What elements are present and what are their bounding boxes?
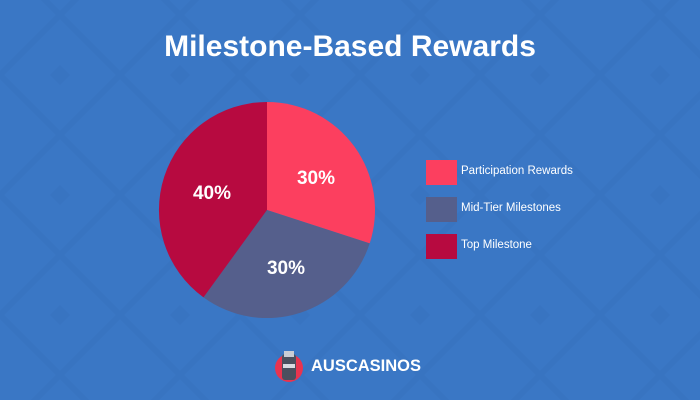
legend item: mid-tier [426, 197, 561, 222]
logo [275, 351, 421, 382]
slice: participation 30% [267, 102, 375, 243]
legend item: participation: Participation Rewards [461, 165, 573, 177]
legend item: top [426, 234, 532, 259]
legend [426, 160, 573, 259]
slice: top 40% [159, 102, 267, 297]
legend item: mid-tier: Mid-Tier Milestones [461, 202, 561, 214]
legend item: top: Top Milestone [461, 239, 532, 251]
icon: mascot [275, 351, 303, 382]
slice: top 40%: 40% [193, 183, 231, 204]
slice: participation 30%: 30% [297, 168, 335, 189]
legend item: participation [426, 160, 573, 185]
title: Milestone-Based Rewards [164, 30, 536, 63]
brand name: AUSCASINOS [311, 357, 421, 375]
slice: mid-tier 30%: 30% [267, 258, 305, 279]
slice: mid-tier 30% [204, 210, 370, 318]
